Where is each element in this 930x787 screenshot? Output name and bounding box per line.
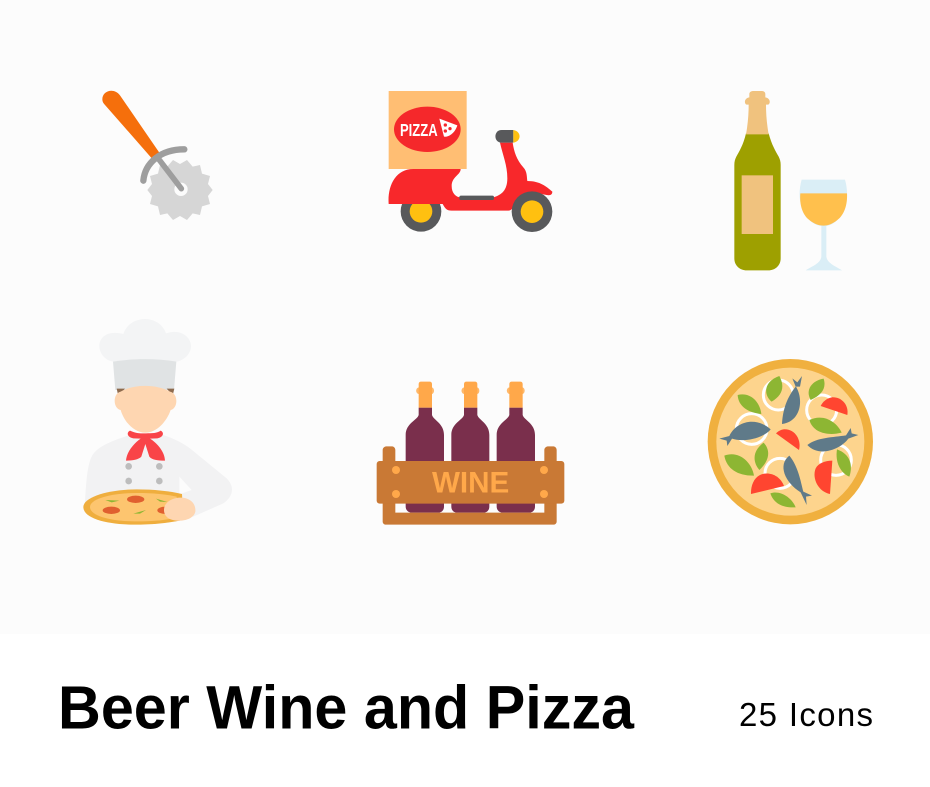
icon: pizza with fish and tomato bbox=[708, 359, 873, 524]
neckerchief bbox=[126, 431, 165, 461]
crate posts and bottom rail bbox=[383, 446, 557, 525]
box label: PIZZA bbox=[400, 120, 438, 140]
bottle bbox=[734, 133, 781, 270]
bottle two bbox=[451, 382, 489, 513]
icon count: 25 Icons bbox=[739, 696, 873, 733]
hand bbox=[164, 498, 195, 521]
bottle three bbox=[497, 382, 535, 513]
buttons bbox=[125, 463, 132, 470]
bottle one bbox=[406, 382, 444, 513]
pizza bbox=[83, 489, 183, 525]
seat bar bbox=[459, 196, 494, 200]
face bbox=[115, 386, 176, 433]
delivery box bbox=[389, 91, 467, 169]
title: Beer Wine and Pizza bbox=[58, 674, 635, 742]
glass bbox=[800, 180, 847, 270]
hair bbox=[117, 389, 125, 396]
jacket bbox=[85, 435, 232, 521]
scooter body bbox=[389, 143, 552, 211]
rear wheel bbox=[401, 191, 441, 232]
icon: wine bottle and glass bbox=[734, 91, 847, 270]
icon: wine crate with three bottles bbox=[377, 382, 564, 525]
arm shadow notch bbox=[179, 477, 192, 494]
front wheel bbox=[512, 191, 552, 232]
icon: pizza delivery scooter bbox=[389, 91, 552, 232]
crate label: WINE bbox=[432, 467, 509, 500]
icon: pizza cutter bbox=[102, 91, 213, 220]
icon: chef holding pizza bbox=[83, 319, 232, 525]
crate front board bbox=[377, 461, 564, 504]
pizza slice logo bbox=[439, 119, 457, 137]
handlebar bbox=[495, 130, 513, 143]
chef hat bbox=[99, 319, 191, 362]
